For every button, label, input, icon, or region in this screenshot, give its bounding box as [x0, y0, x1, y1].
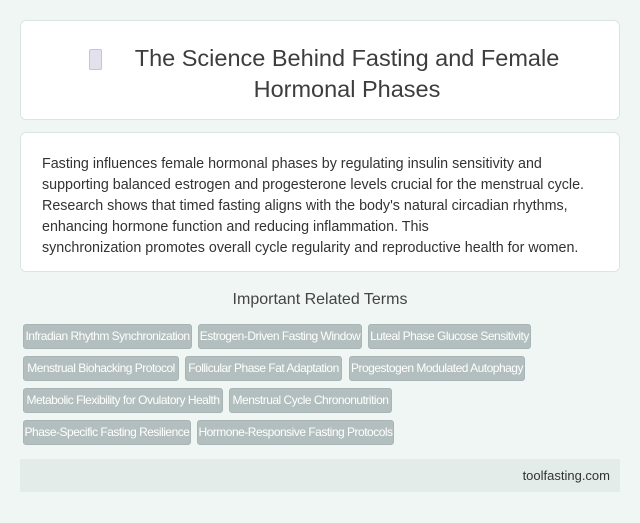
tags: Progestogen Modulated Autophagy — [351, 361, 523, 375]
footer — [20, 459, 620, 492]
related terms heading: Important Related Terms — [233, 291, 407, 308]
tags: Follicular Phase Fat Adaptation — [188, 361, 339, 375]
tags: Estrogen-Driven Fasting Window — [200, 329, 360, 343]
description panel — [20, 132, 620, 272]
tags: Infradian Rhythm Synchronization — [25, 329, 190, 343]
tags: Metabolic Flexibility for Ovulatory Health — [26, 393, 220, 407]
tags: Menstrual Biohacking Protocol — [27, 361, 175, 375]
description text: Research shows that timed fasting aligns with the body's natural circadian rhythms, — [42, 198, 568, 214]
description text: synchronization promotes overall cycle regularity and reproductive health for women. — [42, 240, 578, 256]
description text — [42, 156, 584, 256]
tags: Hormone-Responsive Fasting Protocols — [198, 425, 393, 439]
description text: supporting balanced estrogen and progesterone levels crucial for the menstrual cycle. — [42, 177, 584, 193]
title: The Science Behind Fasting and Female Hormonal Phases — [135, 45, 559, 102]
header panel — [20, 20, 620, 120]
description text: Fasting influences female hormonal phases by regulating insulin sensitivity and — [42, 156, 542, 172]
tags: Menstrual Cycle Chrononutrition — [233, 393, 388, 407]
description text: enhancing hormone function and reducing inflammation. This — [42, 219, 429, 235]
icon: document — [89, 49, 102, 70]
footer: toolfasting.com — [523, 468, 610, 483]
tags: Phase-Specific Fasting Resilience — [25, 425, 189, 439]
tags: Luteal Phase Glucose Sensitivity — [370, 329, 529, 343]
